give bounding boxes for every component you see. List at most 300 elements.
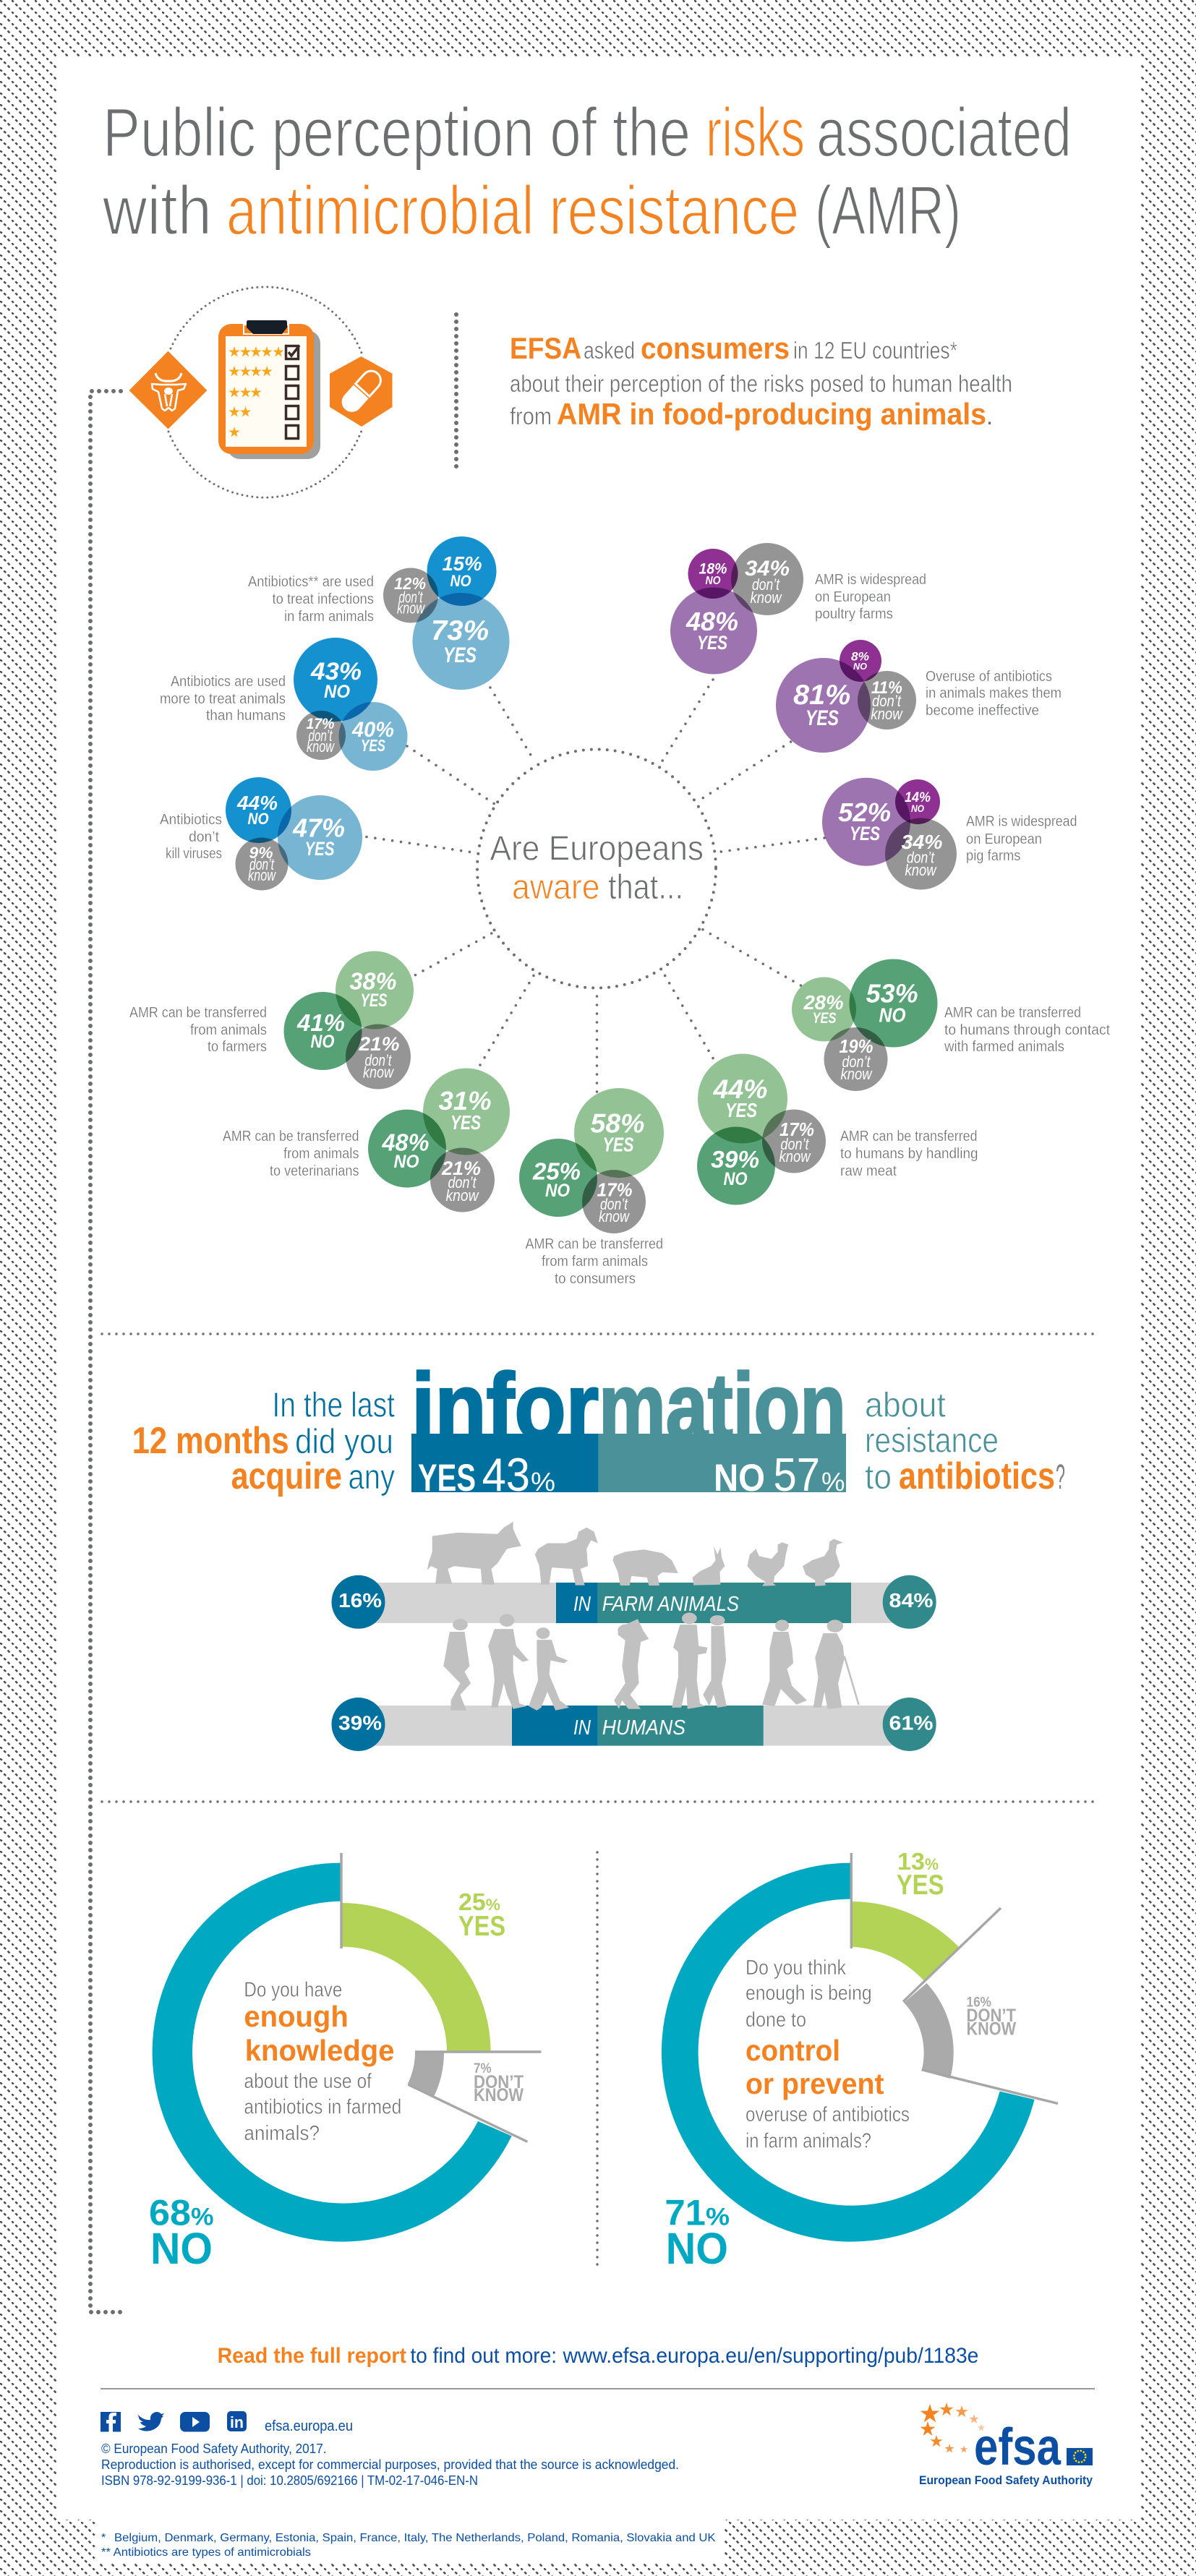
footnotes: ** Antibiotics are types of antimicrobials [101,2546,311,2559]
connector: dotted line down left side [90,391,121,2312]
value: 43% NO: NO [324,682,351,702]
label: 13% yes: % [925,1855,939,1873]
word: information with bar: 43 [482,1448,530,1501]
caption: Antibiotics are used [171,673,286,690]
circles [519,1088,664,1233]
word: information with bar: % [821,1467,845,1497]
value: 34% don't know: know [751,589,782,607]
divider: dotted [102,1332,1093,1335]
caption [840,1128,978,1179]
caption: from animals [283,1145,359,1162]
caption [944,1004,1110,1055]
value: 40% YES: 40% [351,718,394,742]
circles [226,777,362,891]
value: 21% don't know [358,1033,399,1082]
caption: to consumers [555,1270,636,1287]
value: 41% NO [296,1009,345,1052]
label: 25% yes: YES [458,1911,505,1942]
value: 31% YES: 31% [438,1086,492,1116]
value: 34% don't know: 34% [745,557,790,581]
question text left: did you [295,1423,393,1461]
value: 58% YES: 58% [590,1109,645,1139]
caption: AMR can be transferred [223,1128,359,1144]
title: associated [816,94,1072,171]
title: with [102,172,212,249]
word: information with bar: mation [599,1353,846,1459]
value: 44% NO: NO [247,810,269,828]
value: 9% don't know: 9% [249,844,273,862]
panel: footnote box [95,2520,725,2563]
value: 21% don't know: 21% [441,1158,481,1179]
value: 8% NO: NO [853,661,867,672]
value: 48% NO: NO [393,1152,419,1172]
value: 73% YES [431,615,489,667]
value: 21% don't know: know [363,1064,395,1082]
caption: than humans [206,707,286,724]
cluster: handling raw meat [697,1054,978,1204]
circles [776,640,916,753]
value: 11% don't know: 11% [871,678,902,698]
bar: in farm animals: IN [573,1593,591,1616]
label: 68% no: NO [150,2224,213,2273]
caption: from animals [190,1022,267,1038]
value: 48% YES [685,607,738,654]
call to action: read the full report: Read the full report [218,2344,406,2368]
icon: linkedin: in [230,2413,244,2431]
intro text: in 12 EU countries* [793,337,957,364]
question text right: about [865,1387,946,1425]
label: 71% no [665,2193,730,2273]
footer text: copyright: ISBN 978-92-9199-936-1 | doi: 10.2805/692166 | TM-02-17-046-EN-N [101,2473,478,2488]
question text left: acquire [231,1455,342,1497]
label: 68% no [149,2193,214,2273]
caption [248,573,374,625]
value: 28% YES: 28% [803,991,844,1014]
label: 71% no: % [706,2204,730,2231]
label: 68% no: % [191,2204,214,2231]
divider: vertical dotted between donuts [596,1852,599,2266]
value: 34% don't know [745,557,790,607]
segment: 25% yes [341,1903,491,2053]
value: 21% don't know: don’t [448,1173,477,1191]
bar: in humans: IN [573,1716,591,1740]
value: 58% YES [590,1109,645,1156]
value: 40% YES: YES [361,736,385,755]
spokes [367,680,824,1092]
question text: about the use of [244,2070,372,2093]
intro text: asked [584,337,635,364]
label: 13% yes [897,1848,944,1901]
value: 21% don't know: don’t [364,1051,392,1069]
circles [670,543,803,674]
value: 34% don't know [901,831,943,879]
value: 58% YES: YES [603,1134,634,1156]
value: 73% YES: 73% [431,615,489,646]
value: 18% NO: 18% [699,561,727,577]
value: 11% don't know: don’t [872,692,902,710]
caption: to humans by handling [840,1145,978,1162]
caption [129,1004,267,1055]
caption: become ineffective [926,702,1039,719]
caption: raw meat [840,1163,897,1179]
icon: clipboard [218,320,320,459]
footer text: copyright: Reproduction is authorised, except for commercial purposes, provided that the source is acknowledged. [101,2457,679,2472]
separator lines [341,1853,541,2141]
intro text: EFSA [510,331,581,365]
dotted circle around icons [168,287,362,497]
bar: in farm animals: FARM ANIMALS [602,1593,740,1616]
value: 12% don't know: don’t [399,589,423,606]
label: 13% yes: YES [897,1870,944,1901]
hub text: that... [608,868,683,907]
question text left: any [349,1458,395,1497]
icon: pill hexagon [330,356,392,427]
label: 16% don't know: KNOW [966,2019,1016,2039]
value: 19% don't know: know [840,1065,873,1083]
value: 38% YES: 38% [350,968,396,995]
cluster: antibiotics treat infections [248,536,509,690]
dotted hub circle [477,749,716,988]
value: 34% don't know: don’t [907,849,935,866]
cluster: pig farms [822,778,1077,889]
value: 25% NO: NO [545,1181,571,1201]
EU flag [1067,2448,1093,2465]
value: 17% don't know: know [599,1207,631,1225]
caption [966,813,1077,864]
footnotes [101,2532,716,2559]
text: ? [1056,1458,1065,1497]
donut chart: control or prevent [662,1848,1058,2273]
panel: information headline [132,1353,1065,1501]
question text left: In the last [272,1387,395,1425]
value: 9% don't know [248,844,277,884]
intro text: AMR in food-producing animals [557,397,986,431]
logo: efsa: European Food Safety Authority [919,2473,1093,2487]
value: 14% NO [905,790,931,814]
circles [383,536,509,690]
cluster: antibiotics more in animals [160,638,408,771]
question text: Do you have [244,1979,342,2002]
value: 48% YES: 48% [685,607,738,636]
value: 73% YES: YES [443,643,477,667]
icon: linkedin [227,2411,247,2431]
value: 43% NO [310,658,362,702]
logo: efsa [919,2402,1093,2487]
caption: poultry farms [815,606,893,622]
value: 38% YES: YES [360,990,388,1011]
question text: overuse of antibiotics [746,2103,910,2126]
caption: AMR is widespread [815,571,926,588]
label: 25% yes [458,1888,505,1942]
value: 12% don't know: 12% [394,574,426,593]
donut chart: enough knowledge [149,1853,541,2273]
caption: pig farms [966,847,1021,864]
question text: Do you think [746,1956,846,1980]
value: 38% YES [350,968,396,1011]
value: 17% don't know: 17% [597,1179,632,1201]
label: 7% don't know [474,2061,524,2105]
label: 71% no: NO [666,2224,728,2273]
value: 12% don't know [394,574,426,617]
value: 21% don't know: know [445,1186,479,1204]
value: 9% don't know: know [248,866,277,884]
caption: in farm animals [284,608,374,625]
cluster: animals to veterinarians [223,1069,510,1212]
caption: Antibiotics** are used [248,573,374,590]
question text: antibiotics in farmed [244,2095,401,2118]
value: 81% YES: YES [806,706,839,730]
cluster: farm animals to consumers [519,1088,664,1287]
cluster: animals to farmers [129,951,414,1089]
value: 14% NO: 14% [905,790,931,805]
circles [792,959,937,1091]
caption: AMR can be transferred [129,1004,267,1021]
value: 44% YES: YES [725,1099,757,1121]
caption [815,571,926,622]
caption: AMR can be transferred [840,1128,978,1144]
caption: to humans through contact [944,1022,1110,1038]
bar: in farm animals [331,1575,936,1629]
caption [223,1128,359,1179]
icon: facebook [101,2412,121,2432]
caption: on European [966,831,1042,847]
caption: on European [815,589,891,605]
segment: 13% yes [853,1901,959,1982]
caption: more to treat animals [160,690,286,707]
cluster: poultry farms [670,543,926,674]
label: 16% don't know: DON’T [966,2006,1016,2026]
footnotes: * [101,2532,106,2544]
question text: or prevent [746,2067,884,2100]
value: 81% YES [793,680,850,730]
caption: with farmed animals [944,1038,1064,1055]
title [102,94,1072,249]
chart: are Europeans aware that [129,536,1110,1287]
caption: don’t [189,829,219,845]
hub text: aware [512,868,600,907]
value: 17% don't know: 17% [779,1118,814,1140]
value: 21% don't know: 21% [358,1033,399,1055]
divider: dotted [102,1800,1093,1803]
footnotes: Belgium, Denmark, Germany, Estonia, Spain, France, Italy, The Netherlands, Poland, Romania, Slovakia and UK [114,2532,716,2544]
value: 17% don't know: don’t [600,1195,628,1213]
label: 7% don't know: KNOW [474,2085,524,2105]
value: 41% NO: 41% [296,1009,345,1036]
caption: to veterinarians [270,1163,359,1179]
word: information with bar: infor [411,1353,599,1459]
icon group: survey clipboard [130,287,392,497]
intro text: about their perception of the risks posed to human health [510,370,1012,397]
value: 47% YES: YES [305,838,334,860]
call to action: read the full report [218,2344,978,2368]
value: 39% NO: 39% [711,1146,759,1173]
value: 25% NO [532,1158,581,1201]
value: 8% NO [851,649,869,672]
value: 21% don't know [441,1158,481,1204]
question text right: antibiotics [899,1455,1055,1497]
logo stars [921,2402,985,2453]
bar: in farm animals: 84% [889,1589,934,1612]
value: 11% don't know [871,678,904,723]
footer rule [101,2388,1095,2389]
label: 13% yes: 13 [897,1848,925,1875]
caption: from farm animals [542,1253,648,1270]
question text: enough is being [746,1982,872,2005]
circles [283,951,414,1089]
title: antimicrobial resistance [226,172,799,249]
value: 17% don't know [779,1118,814,1165]
value: 47% YES: 47% [292,813,345,843]
caption: AMR can be transferred [525,1236,663,1252]
label: 16% don't know: 16% [966,1995,991,2010]
value: 19% don't know: don’t [842,1053,871,1071]
circles [294,638,408,771]
circles [368,1069,510,1212]
label: 7% don't know: 7% [474,2061,492,2076]
value: 39% NO [711,1146,759,1189]
circles [697,1054,826,1204]
bar: in humans: 61% [889,1712,934,1734]
value: 28% YES: YES [813,1010,836,1027]
caption: Antibiotics [160,811,222,828]
intro text [510,331,1012,431]
question text right: to [865,1458,892,1497]
question text: in farm animals? [746,2130,871,2153]
value: 53% NO: 53% [866,979,918,1008]
separator lines [851,1853,1058,2104]
caption: AMR is widespread [966,813,1077,830]
value: 14% NO: NO [911,803,924,814]
question text left [132,1387,395,1497]
value: 52% YES: YES [850,823,880,844]
value: 25% NO: 25% [532,1158,581,1185]
hub text [490,829,704,907]
value: 44% YES [712,1074,768,1121]
value: 48% NO [382,1129,430,1172]
segment: 71% no [662,1863,1035,2242]
call to action: read the full report: to find out more: [411,2344,557,2368]
value: 28% YES [803,991,844,1027]
value: 52% YES [838,797,891,844]
caption [160,811,222,862]
value: 17% don't know [597,1179,632,1225]
label: 68% no: 68 [149,2193,191,2233]
caption: to farmers [208,1038,267,1055]
value: 31% YES: YES [450,1111,481,1134]
value: 43% NO: 43% [310,658,362,685]
label: 71% no: 71 [665,2193,706,2233]
value: 31% YES [438,1086,492,1134]
question text [746,1956,910,2153]
cluster: contact with farmed animals [792,959,1110,1091]
caption [525,1236,663,1287]
value: 11% don't know: know [871,705,904,723]
value: 15% NO: NO [450,572,471,590]
cluster: antibiotics don't kill viruses [160,777,362,891]
value: 17% don't know: know [779,1147,811,1165]
value: 34% don't know: don’t [752,575,780,594]
word: information with bar: % [531,1467,555,1497]
label: 25% yes: % [486,1896,500,1914]
value: 52% YES: 52% [838,797,891,827]
word: information with bar: 57 [774,1448,820,1501]
bar: in humans: HUMANS [602,1716,686,1740]
footer link: efsa.europa.eu [265,2418,353,2434]
hub text: Are Europeans [490,829,704,868]
question text right [865,1387,1065,1497]
intro text: from [510,403,552,429]
value: 19% don't know [839,1035,873,1083]
caption: in animals makes them [926,685,1062,701]
footer text: copyright [101,2441,679,2488]
value: 18% NO: NO [706,575,721,587]
circles [822,778,957,889]
value: 17% don't know: 17% [307,716,335,732]
value: 18% NO [699,561,727,587]
icon: twitter [137,2412,164,2431]
segment: 68% no [153,1863,512,2242]
cluster: overuse makes ineffective [776,640,1062,753]
word: information with bar: NO [714,1457,765,1499]
value: 44% NO [236,792,278,828]
logo: efsa: efsa [974,2418,1062,2476]
value: 9% don't know: don’t [249,855,275,873]
icons: social media [101,2411,247,2432]
value: 81% YES: 81% [793,680,850,711]
value: 17% don't know: don’t [781,1135,809,1153]
value: 53% NO: NO [879,1004,906,1027]
value: 47% YES [292,813,345,860]
label: 16% don't know [966,1995,1016,2039]
value: 17% don't know: know [307,737,336,756]
word: information with bar: YES [418,1457,476,1499]
value: 15% NO [443,552,482,590]
value: 15% NO: 15% [443,552,482,575]
title: (AMR) [815,172,961,249]
caption: kill viruses [166,845,222,862]
icon: youtube [180,2412,210,2432]
caption: Overuse of antibiotics [926,668,1052,685]
value: 41% NO: NO [311,1032,335,1052]
value: 34% don't know: know [905,861,937,879]
question text: done to [746,2008,806,2032]
question text: knowledge [245,2034,395,2067]
caption: to treat infections [272,591,374,607]
icons: human silhouettes [443,1613,859,1711]
value: 44% YES: 44% [712,1074,768,1104]
icon: cow diamond [130,352,206,428]
word: information with bar [411,1353,846,1501]
title: Public perception of the [103,94,691,171]
icons: farm animal silhouettes [427,1522,843,1586]
question text: control [746,2034,840,2067]
bar: in humans: 39% [338,1712,382,1734]
label: 7% don't know: DON’T [474,2072,524,2092]
segment: 16% don't know [904,1983,954,2079]
intro text: . [986,403,993,429]
value: 48% NO: 48% [382,1129,430,1156]
value: 53% NO [866,979,918,1027]
segment: 7% don't know [408,2053,444,2097]
caption [926,668,1062,719]
value: 17% don't know: don’t [308,727,333,745]
title: risks [706,94,805,171]
caption [160,673,286,724]
value: 44% NO: 44% [236,792,278,814]
value: 34% don't know: 34% [901,831,943,853]
caption: AMR can be transferred [944,1004,1081,1021]
footer text: copyright: © European Food Safety Authority, 2017. [101,2441,327,2456]
